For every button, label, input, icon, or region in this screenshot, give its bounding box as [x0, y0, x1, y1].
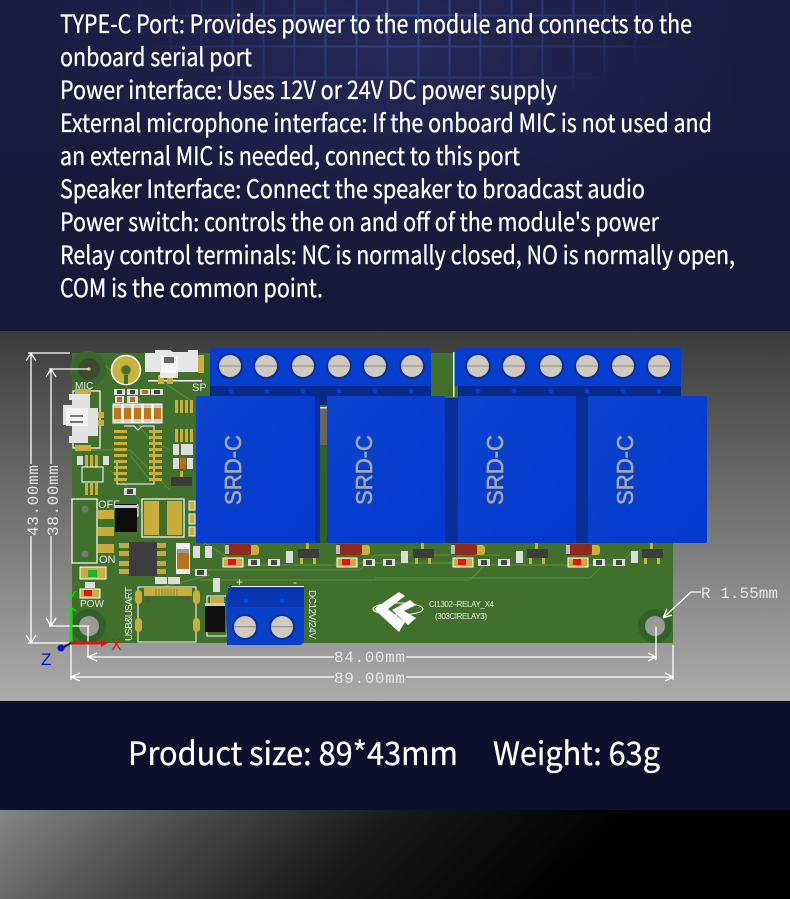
axis gizmo: Z: [41, 650, 51, 669]
relay 3: SRD-C: [482, 435, 508, 505]
power LEDs: POW: [80, 599, 104, 610]
weight text: Weight: 63g: [493, 729, 660, 775]
mounting hole right: [638, 609, 672, 643]
relay 4: SRD-C: [612, 435, 638, 505]
dimension: 43.00mm: 43.00mm: [25, 465, 43, 536]
power switch: OFF: [98, 499, 120, 511]
USB connector: [124, 587, 200, 642]
speaker connector: SP: [192, 382, 207, 394]
power switch: [72, 499, 120, 566]
panel: feature description: [0, 0, 790, 332]
feature text block: [60, 5, 735, 305]
small parts near switch: [155, 546, 220, 592]
relay 2: [327, 396, 459, 543]
SOIC chip: [119, 542, 166, 576]
gold antenna pad: [112, 356, 140, 384]
right resistors and transistor: [124, 444, 193, 495]
black diode: [115, 504, 138, 532]
circuit board: +: [236, 575, 243, 589]
speaker connector: [145, 350, 207, 394]
inductor pads: [142, 499, 184, 537]
axis gizmo: X: [111, 637, 122, 654]
axis gizmo: [41, 589, 122, 669]
product size text: Product size: 89*43mm: [128, 729, 458, 775]
company logo: [373, 592, 423, 632]
feature text block: an external MIC is needed, connect to this port: [60, 137, 520, 173]
feature text block: Speaker Interface: Connect the speaker to broadcast audio: [60, 170, 645, 206]
feature text block: TYPE-C Port: Provides power to the module and connects to the: [60, 5, 692, 41]
capacitor bank: [113, 404, 162, 423]
circuit board: DC12V/24V: [306, 590, 317, 639]
gold pin groups: [77, 400, 193, 495]
feature text block: Power switch: controls the on and off of the module's power: [60, 203, 659, 239]
power input diode: [205, 596, 227, 636]
board label: [429, 600, 495, 621]
power switch: ON: [99, 554, 116, 566]
relay 1: [196, 396, 320, 543]
mic capsule: [70, 351, 106, 387]
dimension: 89.00mm: 89.00mm: [334, 670, 405, 688]
relay driver rows: [223, 543, 663, 567]
terminal block right: [453, 348, 681, 405]
circuit board: [63, 350, 673, 645]
relay 2: SRD-C: [351, 435, 377, 505]
tantalum cap: [176, 543, 190, 574]
relay 4: [588, 396, 707, 543]
dimension lines: [26, 353, 701, 681]
feature text block: onboard serial port: [60, 38, 252, 74]
USB connector: USB&USART: [124, 587, 135, 641]
dimension: 84.00mm: 84.00mm: [334, 649, 405, 667]
feature text block: COM is the common point.: [60, 269, 323, 305]
board traces: [90, 360, 632, 590]
board label: (303CIRELAY3): [435, 612, 487, 621]
relay 1: SRD-C: [220, 435, 246, 505]
side resistors: [189, 501, 195, 536]
dimension: radius: R 1.55mm: [701, 585, 778, 603]
main IC footprint: [114, 426, 162, 484]
panel: product size band: [0, 701, 790, 810]
board label: CI1302–RELAY_X4: [429, 600, 495, 609]
small SMD row: [114, 389, 163, 403]
power terminal block: [226, 587, 304, 645]
power LEDs: [80, 567, 106, 610]
mounting hole left: [72, 609, 106, 643]
feature text block: Power interface: Uses 12V or 24V DC power supply: [60, 71, 557, 107]
axis gizmo: Y: [66, 589, 77, 606]
panel: PCB dimension drawing: [0, 331, 790, 701]
footer gradient strip: [0, 810, 790, 899]
mic connector: MIC: [75, 381, 93, 392]
mic connector: [63, 381, 104, 451]
terminal block left: [210, 348, 431, 405]
relay 3: [458, 396, 589, 543]
circuit board: -: [293, 575, 297, 589]
gap between relays: [319, 407, 327, 543]
dimension: 38.00mm: 38.00mm: [45, 465, 63, 536]
